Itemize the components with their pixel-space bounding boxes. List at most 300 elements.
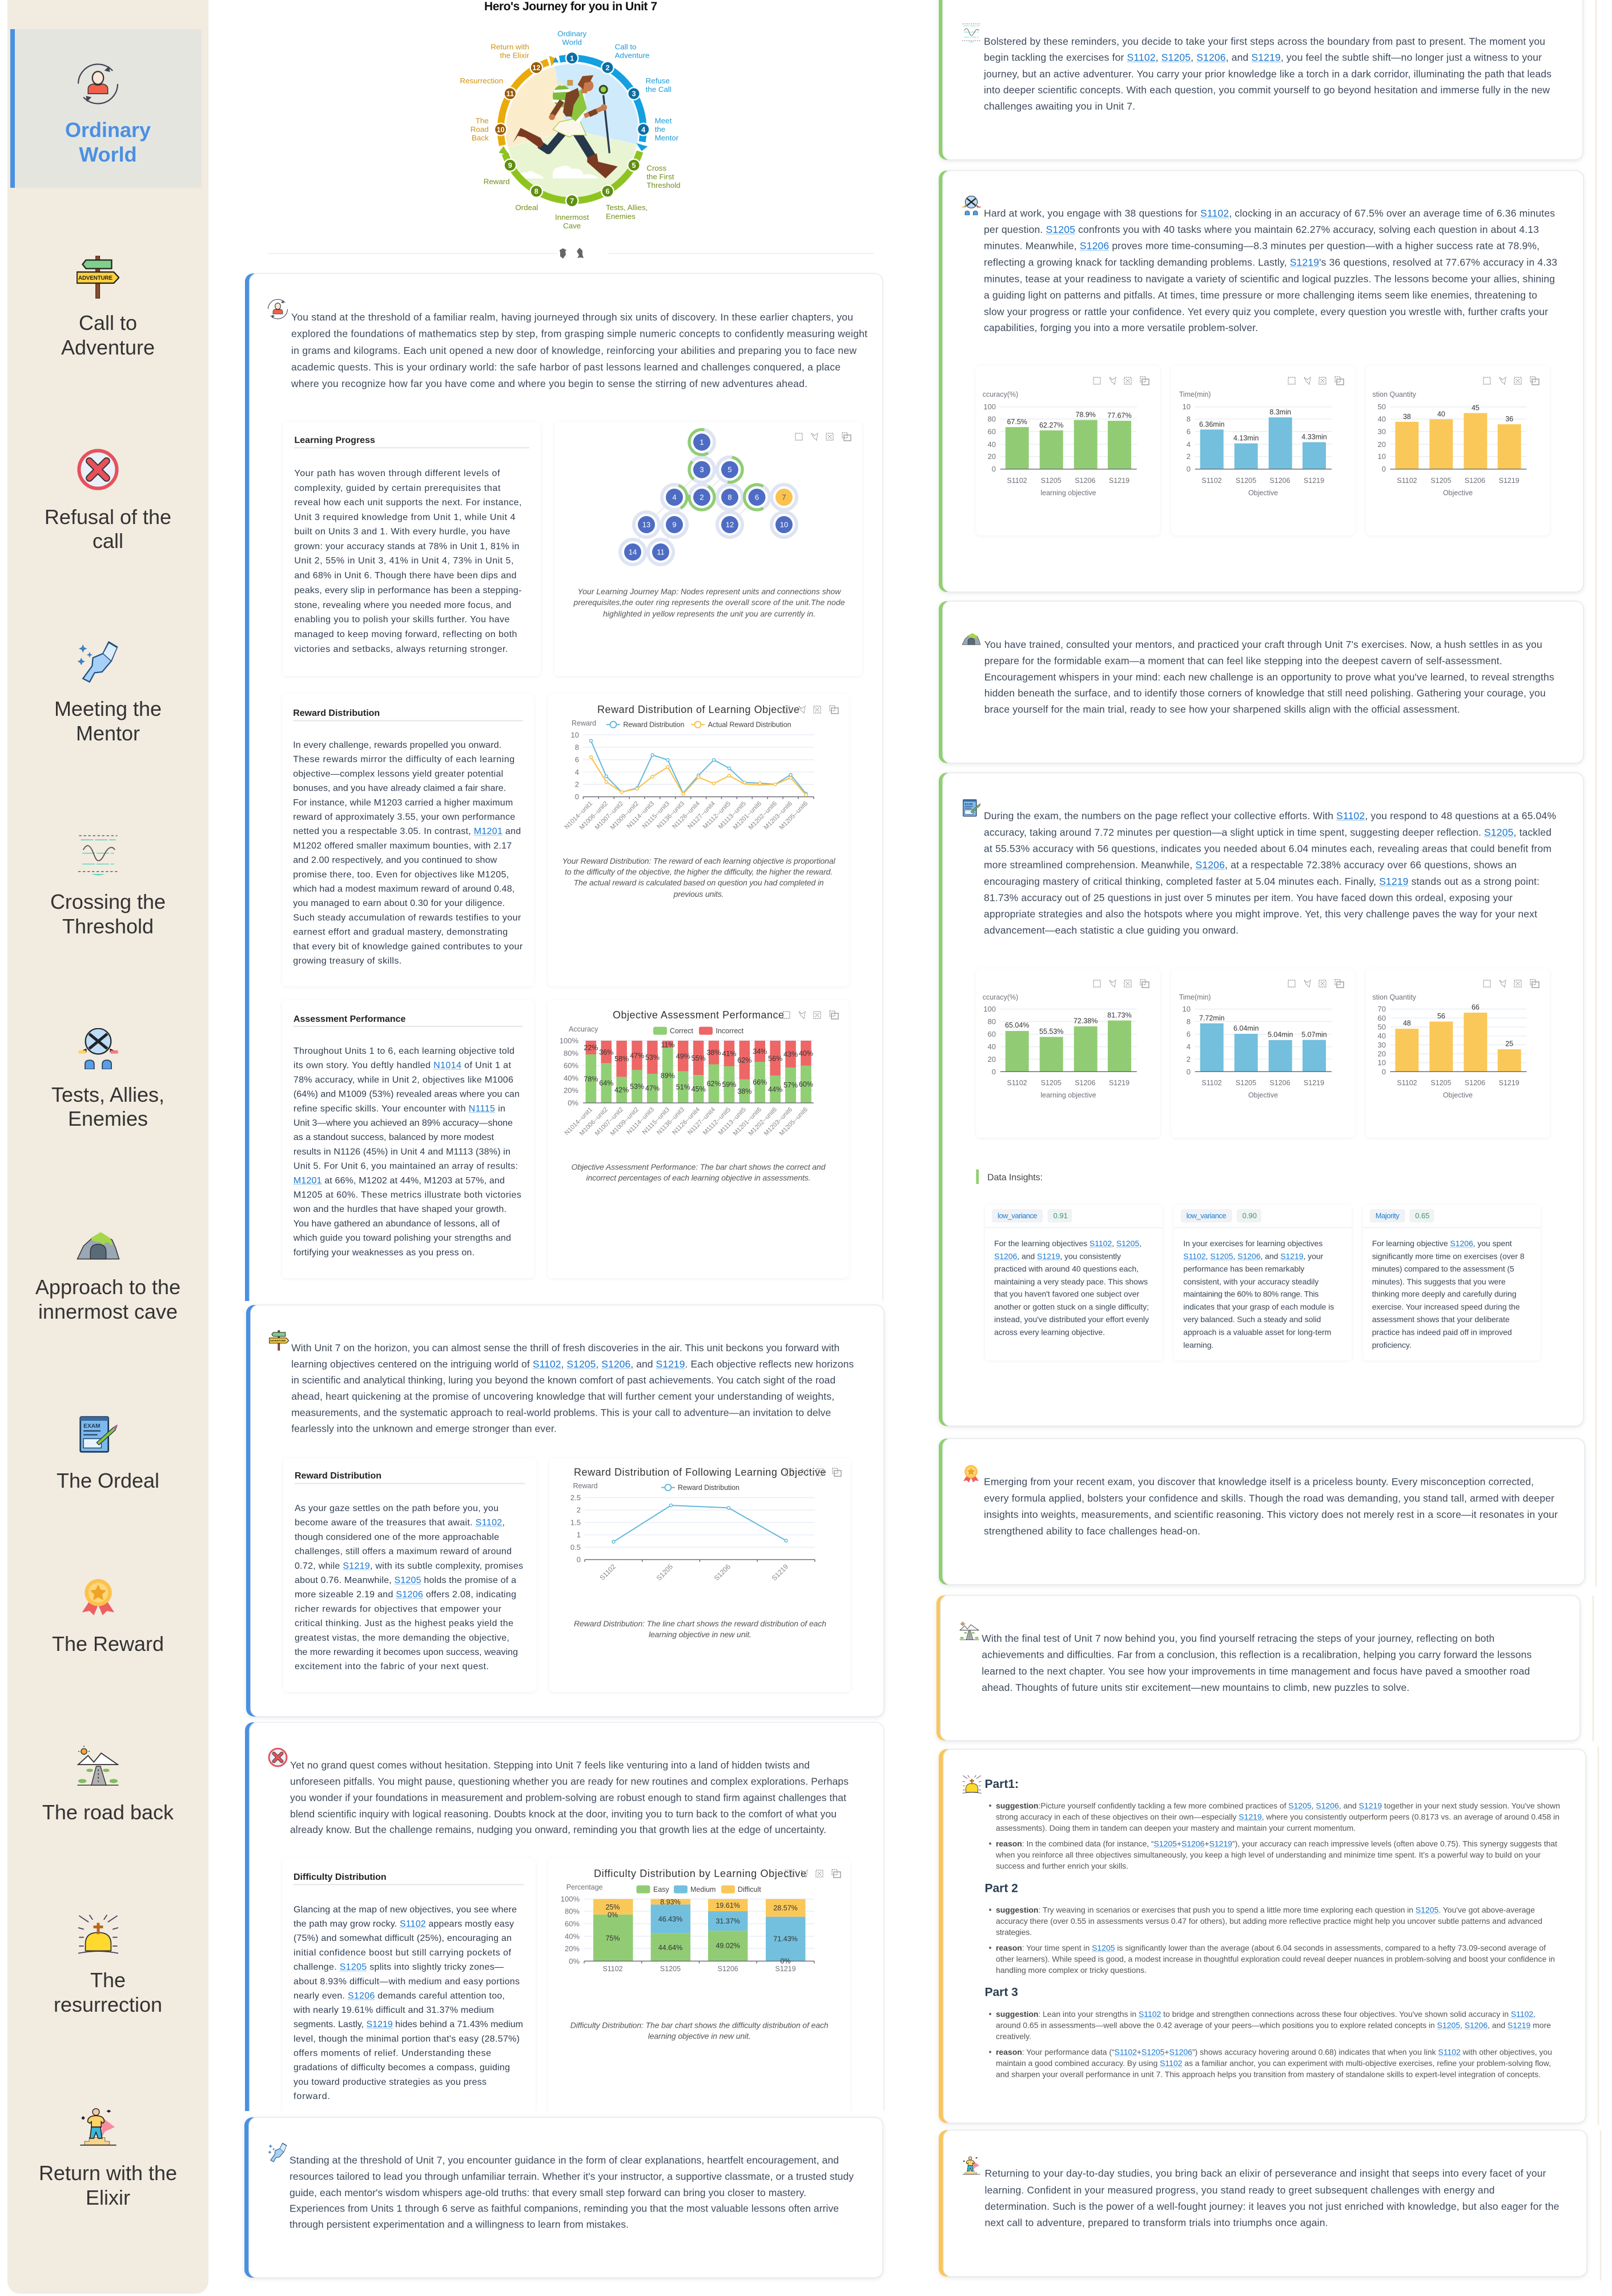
chart: exercise time [1171, 365, 1355, 535]
chart: exam question quantity: 56 [1437, 1012, 1445, 1020]
x-axis labels: S1102 [602, 1965, 623, 1973]
bar value labels: 49.02% [715, 1942, 740, 1950]
bar value labels: 11% [661, 1041, 674, 1049]
panel: Assessment Performance text: (64%) and M1009 (53%) revealed areas where you can [294, 1090, 520, 1099]
panel: difficulty stacked bar chart: Difficulty Distribution by Learning Objective [594, 1868, 806, 1879]
panel: Reward Distribution line chart: 2 [575, 780, 579, 789]
list: Part 3 items [989, 2009, 1552, 2079]
panel: following reward line chart [549, 1459, 851, 1692]
bars: incorrect [586, 1041, 811, 1103]
bar value labels: 51% [676, 1083, 690, 1091]
text block: road back [982, 1633, 1531, 1693]
chart: exercise question quantity: 30 [1378, 427, 1386, 436]
text block: cave: Encouragement whispers in your mind: each new challenge is an opportunity to prove what you've learned, to reveal strengths [984, 671, 1554, 683]
panel: following reward line chart: 0.5 [570, 1543, 581, 1552]
chart: unit nodes [620, 429, 797, 565]
insight card: low_variance 0.91: 0.91 [1053, 1211, 1068, 1220]
bar value labels: 58% [614, 1055, 629, 1063]
panel: following reward line chart: 2 [577, 1506, 581, 1514]
title: Hero's Journey for you in Unit 7 [484, 0, 657, 13]
icon: small divider ornaments [560, 248, 584, 259]
insight card: low_variance 0.90: maintaining the 60% to 80% range. This [1183, 1290, 1318, 1299]
x-axis labels: M1113--unit5 [717, 1106, 747, 1137]
text block: exercise stats: minutes, tease at your readiness to navigate a variety of scientific and logical puzzles. The lessons become your allies, shining [984, 273, 1555, 284]
chart: exam time: 4 [1187, 1042, 1191, 1051]
panel: Learning Progress text: Your path has woven through different levels of [294, 469, 500, 478]
x-axis labels: N1136--unit3 [656, 1106, 686, 1137]
panel: Reward Distribution text: These rewards mirror the difficulty of each learning [293, 755, 514, 764]
insight card: low_variance 0.91 [985, 1205, 1163, 1360]
chart: exam time: 6 [1187, 1030, 1191, 1038]
panel: learning journey map: 11 [657, 548, 665, 556]
chart: exercise question quantity: 45 [1472, 404, 1480, 412]
chart: exercise accuracy: ccuracy(%) [983, 390, 1018, 398]
wheel labels: the First [646, 172, 674, 181]
panel: Assessment Performance text: results in N1126 (45%) in Unit 4 and M1113 (38%) in [294, 1147, 510, 1157]
chart: exercise time: S1205 [1236, 477, 1256, 485]
panel: Learning Progress text: built on Units 3 and 1. With every hurdle, you have [294, 527, 510, 537]
insight card: Majority 0.65: significantly more time on exercises (over 8 [1372, 1251, 1525, 1260]
bar value labels: 28.57% [773, 1904, 798, 1912]
chart: exam time: 5.07min [1301, 1031, 1327, 1039]
caption: highlighted in yellow represents the unit you are currently in. [603, 609, 815, 618]
stacked bars [593, 1899, 805, 1961]
panel: following reward line chart: 1 [577, 1530, 581, 1539]
text block: cave [984, 639, 1554, 715]
insight card: Majority 0.65: minutes) compared to the assessment (5 [1372, 1264, 1514, 1274]
chart: exam accuracy: 100 [983, 1005, 996, 1013]
bar value labels: 64% [599, 1079, 613, 1087]
chart: exam accuracy: ccuracy(%) [983, 993, 1018, 1001]
panel: following reward text: about 0.76. Meanwhile, S1205 holds the promise of a [295, 1576, 516, 1585]
wheel labels: Meet [655, 116, 672, 125]
panel: following reward line chart: 1.5 [570, 1518, 581, 1526]
panel: following reward text: become aware of the treasures that await. S1102, [295, 1518, 505, 1528]
nav item: Return with the Elixir: Elixir [86, 2186, 130, 2209]
chart: exercise question quantity: 40 [1437, 410, 1445, 418]
chart: exam question quantity: Objective [1443, 1091, 1473, 1099]
panel: Learning Progress text [283, 421, 541, 676]
wheel labels: The [476, 116, 489, 125]
panel: Objective Assessment bar chart: 100% [560, 1037, 578, 1045]
x-axis labels: M1007--unit2 [594, 800, 625, 831]
x-axis labels: S1206 [718, 1965, 738, 1973]
text block: exam stats: encouraging mastery of critical thinking, completed faster at 5.04 minutes each. Finally, S1219 stands out as a strong point: [984, 876, 1539, 887]
panel: Assessment Performance text [282, 1000, 534, 1278]
x-axis labels: M1006--unit2 [578, 1106, 609, 1137]
panel: Reward Distribution text: you managed to earn about 0.30 for your diligence. [293, 899, 505, 908]
caption: Objective Assessment Performance: The bar chart shows the correct and [571, 1162, 826, 1171]
chart: exercise accuracy: S1205 [1041, 477, 1062, 485]
caption [562, 856, 835, 899]
bar value labels: 59% [722, 1081, 737, 1089]
chart: exercise accuracy: 80 [988, 414, 996, 424]
panel: Reward Distribution line chart: Reward Distribution of Learning Objective [597, 704, 799, 715]
text block: refusal intro: you wonder if your foundations in measurement and problem-solving are robust enough to stand firm against challenges that [290, 1792, 846, 1803]
panel: following reward text: As your gaze settles on the path before you, you [295, 1504, 499, 1513]
wheel labels: Call to [615, 43, 636, 51]
insight card: low_variance 0.91: that you haven't favored one subject over [994, 1290, 1139, 1299]
panel: Learning Progress text: Learning Progress [295, 436, 375, 445]
insight card: low_variance 0.91: For the learning objectives S1102, S1205, [994, 1239, 1141, 1248]
bar value labels: 78% [584, 1075, 598, 1083]
heading: Part 2: Part 2 [984, 1882, 1018, 1895]
panel: learning journey map: 2 [700, 493, 704, 501]
legend [606, 720, 791, 728]
bar value labels [584, 1041, 813, 1095]
chart: exercise accuracy: 0 [992, 465, 996, 473]
hero's journey wheel: 4 [641, 126, 645, 134]
list: Part 2 items [989, 1906, 1555, 1975]
text block: mentor: Experiences from Units 1 through 6 serve as faithful companions, reminding you that the most valuable lessons often arrive [290, 2203, 839, 2214]
x-axis labels [564, 800, 809, 831]
text block: call to adventure intro: fearlessly into the unknown and emerge stronger than ever. [291, 1423, 557, 1434]
panel: Reward Distribution line chart: 6 [575, 755, 579, 764]
text block: mentor [290, 2154, 854, 2230]
chart: exam question quantity: 20 [1378, 1049, 1386, 1058]
list: Part 1 items: success and further enrich your skills. [996, 1862, 1128, 1871]
panel: following reward line chart: 0 [577, 1555, 581, 1564]
x-axis labels: M1007--unit2 [594, 1106, 625, 1137]
chart: exercise question quantity: S1205 [1430, 477, 1452, 485]
chart: exercise accuracy: 20 [988, 452, 996, 461]
wheel labels: Road [471, 125, 489, 134]
panel: following reward text: greatest vistas, the more demanding the objective, [295, 1633, 509, 1643]
list: Part 1 items [989, 1801, 1560, 1871]
panel: Learning Progress text: grown: your accuracy stands at 78% in Unit 1, 81% in [294, 542, 519, 551]
x-axis labels: N1126--unit4 [671, 800, 701, 831]
legend: Easy [653, 1886, 670, 1894]
insight card: low_variance 0.90: In your exercises for learning objectives [1183, 1239, 1322, 1248]
panel: Objective Assessment bar chart: 40% [564, 1074, 578, 1082]
bar value labels: 71.43% [773, 1935, 798, 1943]
chart: exercise time: 6.36min [1199, 420, 1224, 428]
chart: exercise question quantity: 36 [1505, 415, 1513, 423]
chart: exam time [1171, 969, 1355, 1138]
bar value labels: 49% [676, 1052, 690, 1060]
nav item: Ordinary World (active): World [79, 143, 137, 166]
text block: call to adventure intro: ahead, heart quickening at the promise of uncovering knowledge that will further cement your understanding of weights, [291, 1391, 834, 1402]
nav item: Tests, Allies, Enemies: Tests, Allies, [51, 1083, 164, 1106]
panel: Assessment Performance text: M1205 at 60%. These metrics illustrate both victories [294, 1190, 521, 1200]
chart: exam accuracy: 65.04% [1005, 1021, 1029, 1029]
chart: exam accuracy: S1206 [1075, 1079, 1095, 1087]
chart: exam question quantity: 66 [1472, 1004, 1480, 1012]
panel: Reward Distribution text: For instance, while M1203 carried a higher maximum [293, 798, 513, 808]
panel: following reward text: richer rewards for objectives that empower your [295, 1604, 502, 1614]
panel: Learning Progress text: enabling you to polish your skills further. You have [294, 615, 509, 625]
legend [653, 1027, 744, 1035]
list: Part 3 items: creatively. [996, 2032, 1031, 2041]
caption: The actual reward is calculated based on question you had completed in [574, 878, 824, 887]
hero's journey wheel: 12 [532, 64, 540, 72]
insight card: low_variance 0.90: learning. [1183, 1340, 1213, 1350]
panel: following reward text [283, 1459, 536, 1692]
chart: exam question quantity: 0 [1382, 1068, 1386, 1076]
wheel labels: Return with [491, 43, 529, 51]
icon: mentor [268, 2143, 287, 2162]
nav item: Refusal of the call [45, 449, 171, 553]
insight card: Majority 0.65: proficiency. [1372, 1340, 1412, 1350]
panel: The road back story [936, 1596, 1580, 1741]
panel: difficulty text [282, 1859, 536, 2121]
text block: road back: learned to the next chapter. You see how your improvements in time management and focus have paved a smoother road [982, 1665, 1530, 1677]
chart: exercise accuracy: 40 [988, 440, 996, 449]
text block: cave: hidden beneath the surface, and to identify those corners of knowledge that still need polishing. Gathering your courage, you [984, 687, 1546, 699]
text block: call to adventure intro [291, 1342, 854, 1434]
chart: exam question quantity: 25 [1505, 1040, 1513, 1048]
panel: difficulty text: gradations of difficulty becomes a compass, guiding [294, 2063, 510, 2073]
x-axis labels: S1206 [713, 1562, 732, 1582]
nav item: The Ordeal: The Ordeal [57, 1469, 159, 1492]
chart: exam time: 0 [1187, 1068, 1191, 1076]
text block: exam stats: accuracy, taking around 7.72 minutes per question—a slight uptick in time spent, suggesting deeper reflection. S1205, tackled [984, 827, 1551, 838]
panel: Reward Distribution text: bonuses, and you have already claimed a fair share. [293, 784, 506, 793]
chart: exercise accuracy: 67.5% [1007, 418, 1027, 426]
x-axis labels: M1201--unit6 [732, 1106, 763, 1137]
text block: ordinary world intro: in grams and kilograms. Each unit opened a new door of knowledge, reinforcing your abilities and preparing you to face new [291, 345, 857, 356]
x-axis labels: S1219 [775, 1965, 796, 1973]
chart: exam question quantity: S1206 [1465, 1079, 1485, 1087]
panel: learning journey map: 10 [780, 521, 788, 529]
chart: exercise accuracy: S1219 [1109, 477, 1129, 485]
bar value labels: 47% [645, 1085, 660, 1093]
chart: exam time: 7.72min [1199, 1014, 1224, 1022]
chart: exam accuracy: 0 [992, 1068, 996, 1076]
chart: exam time: S1219 [1304, 1079, 1324, 1087]
caption: Your Reward Distribution: The reward of each learning objective is proportional [562, 856, 835, 865]
panel: difficulty text: you toward productive strategies as you press [294, 2077, 487, 2087]
chart: exercise question quantity: S1206 [1465, 477, 1485, 485]
x-axis labels: M1112--unit5 [702, 800, 732, 831]
panel: learning journey map: 14 [629, 548, 637, 556]
text block: reward: insights into weights, measurements, and scientific reasoning. This victory does not merely rest in a score—it resonates in your [984, 1509, 1558, 1520]
nav item: Meeting the Mentor [54, 642, 162, 745]
panel: learning journey map: 9 [672, 521, 677, 529]
line series: actual reward [589, 756, 807, 796]
bar value labels: 38% [737, 1087, 751, 1095]
bar value labels: 8.93% [660, 1898, 681, 1906]
insight card: low_variance 0.91: low_variance [998, 1211, 1037, 1220]
text block: exam stats [984, 810, 1556, 936]
panel: learning journey map: 1 [700, 438, 704, 446]
text block: exam stats: more streamlined comprehension. Meanwhile, S1206, at a respectable 72.38% accuracy over 66 questions, shows an [984, 859, 1517, 871]
nav item: Call to Adventure: Call to [79, 311, 137, 335]
bar value labels: 57% [783, 1081, 798, 1089]
text block: call to adventure intro: measurements, and the systematic approach to real-world problems. This is your call to adventure—an invitation to delve [291, 1407, 831, 1418]
panel: Learning Progress text: Unit 3 required knowledge from Unit 1, while Unit 4 [294, 513, 515, 522]
bar value labels: 62% [737, 1056, 751, 1064]
panel: Objective Assessment bar chart: 80% [564, 1049, 578, 1057]
x-axis labels: M1202--unit6 [747, 1106, 778, 1137]
nav item: The Reward [52, 1579, 164, 1655]
hero's journey wheel: 3 [632, 90, 636, 98]
insight card: Majority 0.65: exercise. Your increased speed during the [1372, 1302, 1520, 1311]
panel: Assessment Performance text: fortifying your weaknesses as you press on. [294, 1248, 475, 1258]
bar value labels: 36% [599, 1048, 613, 1056]
bar value labels: 75% [605, 1934, 620, 1942]
panel: Objective Assessment bar chart: 20% [564, 1086, 578, 1095]
x-axis labels: M1205--unit6 [778, 1106, 809, 1137]
text block: ordinary world intro: where you recognize how far you have come and where you begin to sense the stirring of new adventures ahead. [291, 378, 807, 389]
text block: exercise stats: reflecting a growing knack for tackling demanding problems. Lastly, S1219's 36 questions, resolved at 77.67% accuracy in 4.33 [984, 257, 1557, 268]
icon: elixir hero [963, 2157, 980, 2174]
nav item: Return with the Elixir: Return with the [39, 2161, 177, 2185]
list: Part 2 items: other learners). While speed is good, a modest increase in thoughtful exploration could reveal deeper nuances in problem-solving and boost your confidence in [996, 1955, 1555, 1964]
chart: exam accuracy: 80 [988, 1017, 996, 1026]
wheel labels: the [655, 125, 665, 134]
list: Part 1 items: when you reinforce all three objectives simultaneously, you keep a high level of understanding and minimize time spent. It's a powerful way to build on your [995, 1850, 1541, 1859]
panel: Learning Progress text: managed to keep moving forward, reflecting on both [294, 630, 517, 639]
nav item: The Ordeal [57, 1417, 159, 1492]
nav item: Call to Adventure: Adventure [61, 336, 155, 359]
chart: exam question quantity: S1219 [1499, 1079, 1519, 1087]
insight card: Majority 0.65: assessment shows that your deliberate [1372, 1315, 1510, 1324]
panel: learning journey map: 7 [782, 493, 786, 501]
x-axis labels: M1009--unit2 [609, 1106, 640, 1137]
x-axis labels: N1127--unit4 [686, 800, 717, 831]
text block: return: learning. Confident in your measured progress, you stand ready to greet subsequent challenges with energy and [984, 2184, 1495, 2196]
text block: return: next call to adventure, prepared to transform trials into triumphs once again. [984, 2217, 1328, 2229]
chart: exercise question quantity: Objective [1443, 489, 1473, 497]
icon: resurrection [963, 1775, 981, 1793]
nav item: Tests, Allies, Enemies [51, 1029, 164, 1130]
nav item: Tests, Allies, Enemies: Enemies [68, 1107, 148, 1130]
panel: Reward Distribution text: netted you a respectable 3.05. In contrast, M1201 and [293, 827, 521, 836]
bar value labels: 53% [630, 1082, 644, 1090]
wheel labels: the Call [646, 85, 672, 94]
nav item: Call to Adventure [61, 256, 155, 359]
insight card: low_variance 0.90: consistent, with your accuracy steadily [1183, 1277, 1318, 1286]
chart: exam time: 6.04min [1233, 1024, 1259, 1032]
chart: exercise accuracy: 77.67% [1107, 412, 1132, 420]
text block: exercise stats [984, 208, 1557, 333]
hero's journey wheel [460, 29, 681, 230]
nav item: Crossing the Threshold [50, 836, 166, 938]
nav item: Approach to the innermost cave: Approach to the [35, 1275, 180, 1299]
list: Part 2 items: reason: Your time spent in S1205 is significantly lower than the average (about 6.04 seconds in assessments, compared to a hefty 73.09-second average of [996, 1943, 1546, 1952]
panel: Assessment Performance text: Throughout Units 1 to 6, each learning objective told [294, 1046, 514, 1056]
chart: exercise accuracy: 78.9% [1075, 411, 1096, 419]
text block: exam stats: advancement—each statistic a clue guiding you onward. [984, 924, 1239, 936]
hero's journey wheel: 9 [508, 162, 512, 170]
chart: exam accuracy: 40 [988, 1042, 996, 1051]
insight card: Majority 0.65: For learning objective S1206, you spent [1372, 1239, 1512, 1248]
sidebar: journey stages [7, 0, 208, 2294]
panel: Assessment Performance text: Unit 3—where you achieved an 89% accuracy—shone [294, 1118, 513, 1128]
panel: Approach to the innermost cave story [939, 601, 1583, 763]
panel: difficulty text: the path may grow rocky. S1102 appears mostly easy [294, 1919, 514, 1929]
chart: exercise time: 4 [1187, 440, 1191, 449]
x-axis labels: N1014--unit1 [564, 800, 594, 831]
panel: Reward Distribution text [282, 694, 534, 986]
panel: Reward Distribution text: and 2.00 respectively, and you continued to show [293, 856, 497, 865]
x-axis labels [564, 1106, 809, 1137]
text block: cave: prepare for the formidable exam—a moment that can feel like stepping into the deepest cavern of self-assessment. [984, 655, 1502, 666]
list: Part 3 items: around 0.65 in assessments—well above the 0.42 average of your peers—which positions you to explore related concepts in S1205, S1206, and S1219 more [996, 2021, 1551, 2030]
panel: Reward Distribution text: earnest effort and gradual mastery, demonstrating [293, 928, 508, 937]
hero's journey wheel: 8 [534, 188, 538, 196]
panel: learning journey map: 12 [726, 521, 734, 529]
panel: Assessment Performance text: which guide you toward polishing your strengths and [293, 1234, 511, 1243]
bar value labels: 56% [768, 1055, 782, 1063]
nav item: The resurrection [54, 1915, 162, 2016]
chart: exam time: Time(min) [1179, 993, 1211, 1001]
nav item: Crossing the Threshold: Threshold [62, 915, 154, 938]
insight card: low_variance 0.90: low_variance [1187, 1211, 1227, 1220]
panel: Reward Distribution line chart: 10 [571, 731, 579, 739]
panel: Reward Distribution line chart: 4 [575, 768, 579, 776]
bar value labels: 44.64% [658, 1944, 682, 1952]
wheel labels: Cave [563, 221, 581, 230]
panel: difficulty stacked bar chart: 40% [565, 1932, 580, 1940]
x-axis labels: M1009--unit2 [609, 800, 640, 831]
legend: Actual Reward Distribution [708, 720, 791, 728]
panel: following reward line chart: Reward [573, 1482, 598, 1490]
legend: Reward Distribution [678, 1484, 739, 1492]
panel: following reward text: though considered one of the more approachable [295, 1532, 499, 1542]
text block: return: determination. Such is the power of a well-fought journey: it leaves you not just enriched with knowledge, but also eager for the [984, 2201, 1559, 2212]
icon: medal [963, 1465, 979, 1483]
bar value labels: 42% [614, 1086, 629, 1094]
hero's journey wheel: 2 [605, 64, 610, 72]
faint right edge lines [1593, 0, 1601, 2281]
chart: exam time: S1206 [1269, 1079, 1291, 1087]
panel: Assessment Performance text: its own story. You deftly handled N1014 of Unit 1 at [294, 1061, 511, 1070]
text block: exercise stats: capabilities, forging you into a more versatile problem-solver. [984, 322, 1258, 333]
x-axis labels: M1203--unit6 [763, 800, 794, 831]
chart: exam accuracy: S1219 [1109, 1079, 1129, 1087]
text block: mentor: resources tailored to lead you through unfamiliar terrain. Whether it's your instructor, a supportive classmate, or a trusted study [290, 2170, 854, 2182]
text block: ordinary world intro: You stand at the threshold of a familiar realm, having journeyed through six units of discovery. In these earlier chapters, you [291, 312, 853, 323]
nav item: The resurrection: The [90, 1968, 126, 1992]
list: Part 2 items: strategies. [996, 1928, 1032, 1937]
x-axis labels: N1136--unit3 [656, 800, 686, 831]
nav item: Meeting the Mentor: Mentor [76, 722, 140, 745]
panel: Assessment Performance text: Assessment Performance [294, 1014, 406, 1024]
text block: mentor: Standing at the threshold of Unit 7, you encounter guidance in the form of clear explanations, heartfelt encouragement, and [290, 2154, 839, 2166]
insight card: low_variance 0.90 [1174, 1205, 1352, 1360]
chart: exam time: 2 [1187, 1055, 1191, 1064]
panel: following reward text: critical thinking. Just as the highest peaks yield the [295, 1619, 513, 1629]
x-axis labels: M1203--unit6 [763, 1106, 794, 1137]
x-axis labels: M1006--unit2 [578, 800, 609, 831]
nav item: The Reward: The Reward [52, 1632, 164, 1655]
wheel labels: Threshold [646, 181, 681, 190]
panel: learning journey map: 5 [727, 465, 732, 474]
text block: reward: every formula applied, bolsters your confidence and skills. Though the road was demanding, you stand tall, armed with deeper [984, 1492, 1554, 1504]
list: Part 2 items: handling more complex or tricky questions. [996, 1965, 1147, 1975]
x-axis labels: M1202--unit6 [747, 800, 778, 831]
heading: Part 3: Part 3 [984, 1985, 1018, 1999]
text block: road back: achievements and difficulties. Far from a conclusion, this reflection is a recalibration, helping you carry forward the lessons [982, 1649, 1531, 1661]
text block: exam stats: During the exam, the numbers on the page reflect your collective efforts. With S1102, you respond to 48 questions at a 65.04% [984, 810, 1556, 821]
icon: tests [962, 196, 980, 215]
chart: exam time: Objective [1248, 1091, 1278, 1099]
hero's journey wheel: 7 [570, 197, 574, 205]
bar value labels: 46.43% [658, 1915, 682, 1923]
text block: ordinary world intro: academic quests. This is your ordinary world: the safe harbor of past lessons learned and challenges conquered, a place [291, 361, 841, 373]
x-axis labels: N1114--unit3 [626, 800, 656, 830]
chart: exercise question quantity: 38 [1403, 413, 1411, 421]
chart: exercise time: 0 [1187, 465, 1191, 473]
chart: exam question quantity: 70 [1378, 1005, 1386, 1013]
insight card: Majority 0.65 [1363, 1205, 1541, 1360]
panel: Ordinary World story [243, 273, 888, 1324]
bar value labels: 31.37% [715, 1918, 740, 1926]
chart: exercise time: S1206 [1269, 477, 1291, 485]
panel: following reward text: more sizeable 2.19 and S1206 offers 2.08, indicating [295, 1590, 516, 1600]
